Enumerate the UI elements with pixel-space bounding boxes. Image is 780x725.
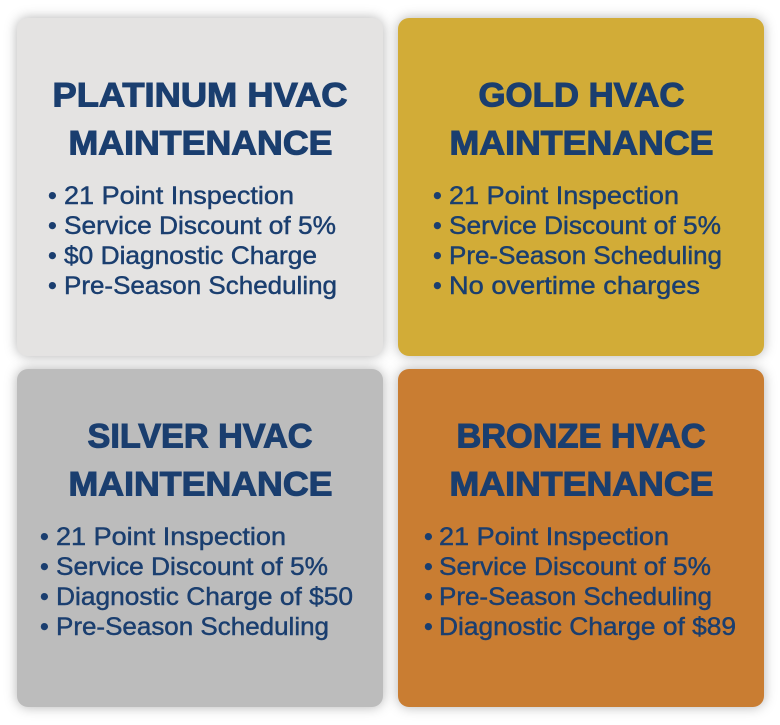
silver feature list: •: [40, 553, 49, 581]
silver heading: SILVER HVAC: [88, 417, 313, 455]
panel: platinum: [17, 18, 383, 356]
platinum heading: MAINTENANCE: [68, 124, 332, 162]
bronze feature list: •: [424, 523, 433, 551]
gold heading: GOLD HVAC: [478, 76, 685, 114]
panel: gold: [398, 18, 764, 356]
bronze feature list: •: [424, 613, 433, 641]
bronze feature list: •: [424, 583, 433, 611]
silver feature list: Pre-Season Scheduling: [56, 613, 329, 641]
silver feature list: •: [40, 583, 49, 611]
platinum feature list: [48, 182, 337, 300]
panel: silver: [17, 369, 383, 707]
bronze feature list: Diagnostic Charge of $89: [439, 613, 736, 641]
silver heading: MAINTENANCE: [68, 465, 332, 503]
silver background: [17, 369, 383, 707]
gold heading: [450, 76, 714, 162]
platinum heading: PLATINUM HVAC: [52, 76, 348, 114]
gold feature list: •: [433, 242, 442, 270]
bronze background: [398, 369, 764, 707]
platinum feature list: Service Discount of 5%: [64, 212, 336, 240]
gold feature list: Service Discount of 5%: [449, 212, 721, 240]
gold feature list: •: [433, 182, 442, 210]
gold feature list: [433, 182, 722, 300]
bronze heading: [450, 417, 714, 503]
silver feature list: •: [40, 613, 49, 641]
platinum feature list: •: [48, 272, 57, 300]
silver feature list: •: [40, 523, 49, 551]
gold feature list: 21 Point Inspection: [449, 182, 679, 210]
silver feature list: [40, 523, 353, 641]
platinum feature list: 21 Point Inspection: [64, 182, 294, 210]
platinum feature list: •: [48, 182, 57, 210]
panel: bronze: [398, 369, 764, 707]
silver feature list: Service Discount of 5%: [56, 553, 328, 581]
gold background: [398, 18, 764, 356]
gold feature list: Pre-Season Scheduling: [449, 242, 722, 270]
platinum feature list: •: [48, 242, 57, 270]
silver heading: [68, 417, 332, 503]
gold feature list: No overtime charges: [449, 272, 700, 300]
gold feature list: •: [433, 212, 442, 240]
platinum heading: [52, 76, 348, 162]
silver feature list: 21 Point Inspection: [56, 523, 286, 551]
platinum feature list: Pre-Season Scheduling: [64, 272, 337, 300]
bronze feature list: •: [424, 553, 433, 581]
bronze heading: MAINTENANCE: [450, 465, 714, 503]
silver feature list: Diagnostic Charge of $50: [56, 583, 353, 611]
bronze feature list: 21 Point Inspection: [439, 523, 669, 551]
bronze feature list: Pre-Season Scheduling: [439, 583, 712, 611]
bronze heading: BRONZE HVAC: [456, 417, 706, 455]
platinum feature list: $0 Diagnostic Charge: [64, 242, 317, 270]
bronze feature list: Service Discount of 5%: [439, 553, 711, 581]
platinum feature list: •: [48, 212, 57, 240]
gold feature list: •: [433, 272, 442, 300]
platinum background: [17, 18, 383, 356]
gold heading: MAINTENANCE: [450, 124, 714, 162]
bronze feature list: [424, 523, 736, 641]
